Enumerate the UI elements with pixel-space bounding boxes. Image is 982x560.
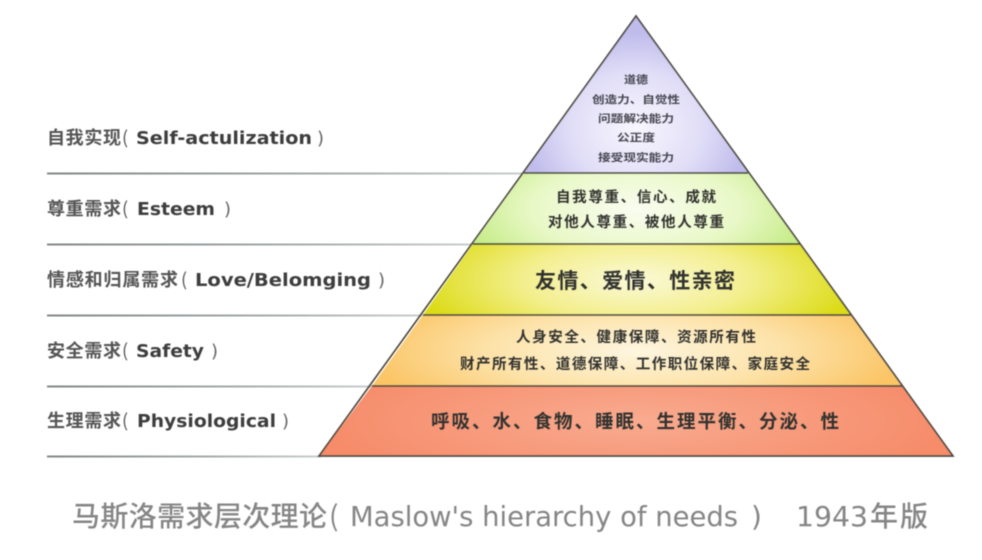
label: physiological	[47, 407, 289, 433]
text: love and belonging needs: 友情、爱情、性亲密	[535, 269, 735, 293]
text: safety needs	[460, 328, 810, 373]
pyramid	[319, 16, 953, 456]
title caption: 年版	[870, 495, 928, 535]
label: self-actualization: 自我实现	[47, 124, 121, 150]
title caption	[72, 495, 928, 535]
label: esteem: Esteem	[137, 199, 215, 220]
label: love and belonging	[47, 266, 385, 292]
label: physiological: Physiological	[137, 411, 276, 432]
label: esteem: 尊重需求	[47, 195, 121, 221]
label: love and belonging: (	[181, 266, 187, 292]
text: self-actualization needs: 创造力、自觉性	[592, 93, 681, 106]
label: physiological: 生理需求	[47, 407, 121, 433]
tier: safety	[372, 315, 902, 386]
text: esteem needs	[548, 188, 724, 231]
horizontal rules linking labels to pyramid tiers	[47, 172, 527, 458]
label: safety: Safety	[136, 341, 204, 362]
title caption: Maslow's hierarchy of needs	[350, 500, 738, 533]
label: esteem	[47, 195, 231, 221]
text: safety needs: 人身安全、健康保障、资源所有性	[516, 328, 756, 346]
tier: physiological	[319, 386, 953, 456]
title caption: (	[329, 495, 338, 535]
label: safety	[47, 337, 218, 363]
tier: self-actualization	[524, 16, 748, 173]
text: self-actualization needs: 问题解决能力	[598, 112, 674, 125]
label: esteem: (	[122, 195, 128, 221]
left labels	[47, 124, 385, 433]
text: esteem needs: 对他人尊重、被他人尊重	[548, 213, 724, 231]
label: safety: (	[122, 337, 128, 363]
text: esteem needs: 自我尊重、信心、成就	[556, 188, 716, 206]
text: safety needs: 财产所有性、道德保障、工作职位保障、家庭安全	[460, 355, 810, 373]
tier: love and belonging	[423, 244, 851, 315]
title caption: 马斯洛需求层次理论	[72, 495, 327, 535]
label: love and belonging: )	[378, 270, 385, 291]
label: physiological: )	[282, 411, 289, 432]
tier: esteem	[473, 173, 800, 244]
title caption: )	[751, 500, 762, 533]
label: self-actualization: )	[317, 128, 324, 149]
label: safety: )	[211, 341, 218, 362]
label: esteem: )	[224, 199, 231, 220]
label: self-actualization: Self-actulization	[136, 128, 312, 149]
title caption: 1943	[796, 500, 868, 533]
label: love and belonging: 情感和归属需求	[47, 266, 178, 292]
label: physiological: (	[122, 407, 128, 433]
text: physiological needs: 呼吸、水、食物、睡眠、生理平衡、分泌、性	[431, 411, 839, 432]
text: self-actualization needs	[592, 73, 681, 164]
text: self-actualization needs: 公正度	[617, 131, 656, 144]
label: safety: 安全需求	[47, 337, 121, 363]
text: self-actualization needs: 接受现实能力	[598, 151, 674, 164]
label: self-actualization: (	[122, 124, 128, 150]
pyramid outline	[319, 16, 953, 456]
text: self-actualization needs: 道德	[624, 73, 649, 86]
pyramid tier text	[431, 73, 839, 432]
label: self-actualization	[47, 124, 324, 150]
label: love and belonging: Love/Belomging	[195, 270, 371, 291]
